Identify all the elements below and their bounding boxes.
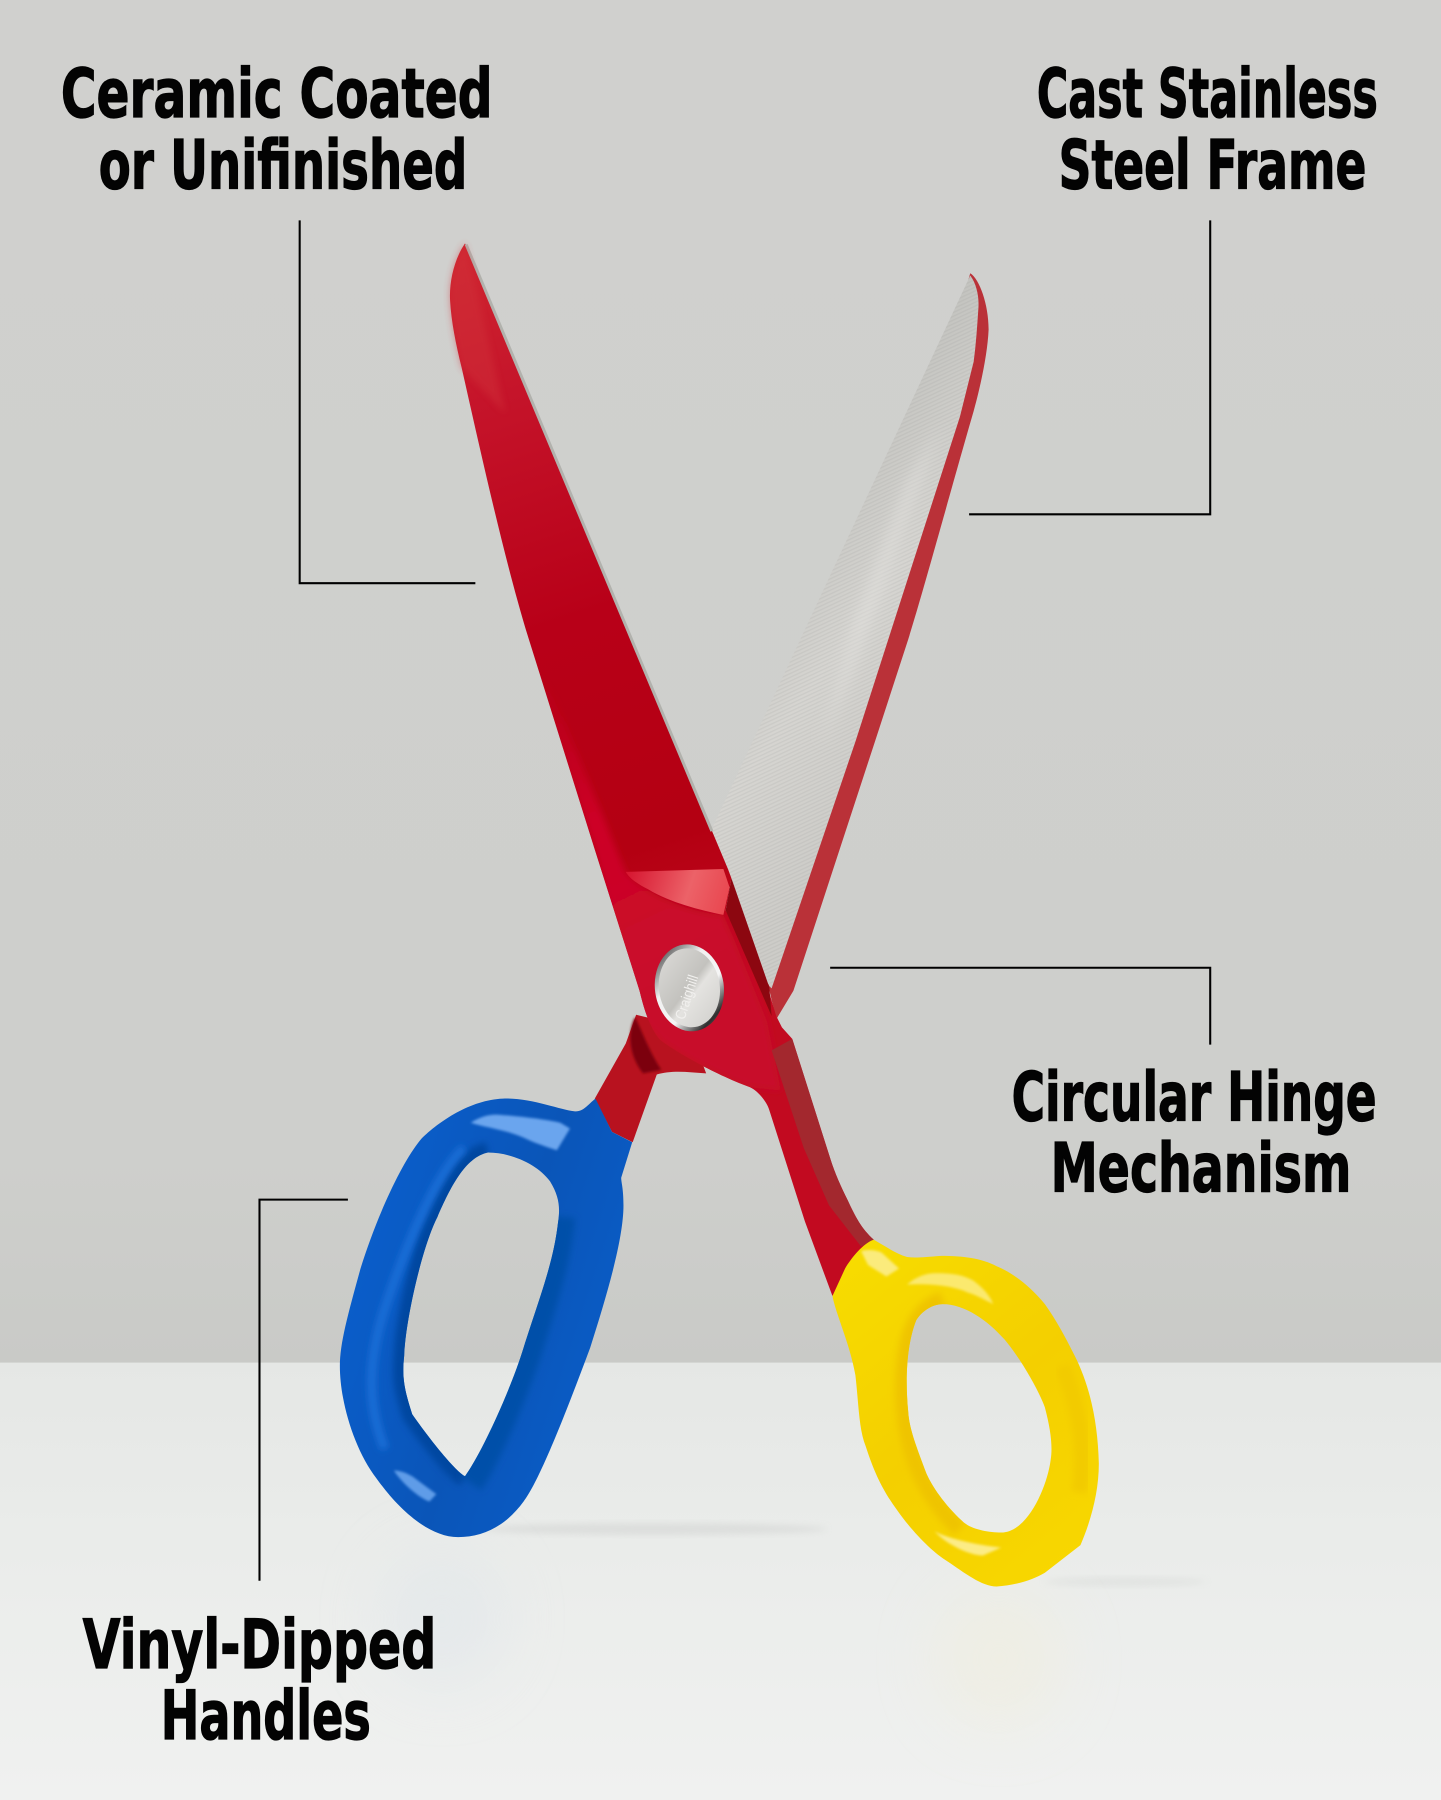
yellow handle <box>832 1240 1099 1586</box>
leader line to blue handle <box>259 1200 348 1581</box>
heading: Ceramic Coated or Unifinished <box>61 54 493 204</box>
heading: Vinyl-Dipped Handles: Vinyl-Dipped <box>83 1605 436 1684</box>
callout: ceramic coated <box>61 54 493 583</box>
coated texture at blade tip <box>450 243 505 413</box>
floor shadows and reflections <box>379 1523 1206 1728</box>
heading: Vinyl-Dipped Handles: Handles <box>161 1676 371 1755</box>
callout: vinyl handles <box>83 1200 436 1755</box>
blue handle highlights <box>471 1115 570 1150</box>
heading: Ceramic Coated or Unifinished: or Unifinished <box>99 125 467 204</box>
right blade: red frame edge <box>768 273 989 1019</box>
heading: Circular Hinge Mechanism <box>1012 1057 1377 1208</box>
lower body lighter face <box>551 710 777 1090</box>
heading: Cast Stainless Steel Frame <box>1037 54 1378 204</box>
blade inner steel edge <box>466 245 712 831</box>
leader line to right blade <box>969 220 1210 514</box>
yellow handle highlights <box>861 1250 899 1277</box>
scissors <box>340 243 1099 1586</box>
background wall <box>0 0 1441 1363</box>
background table surface <box>0 1363 1441 1800</box>
callout: circular hinge <box>830 968 1377 1208</box>
callout: cast stainless <box>969 54 1378 514</box>
leader line to hinge <box>830 968 1210 1045</box>
left handle arm <box>595 1015 706 1142</box>
lower arm shaded side <box>772 1039 874 1247</box>
heading: Ceramic Coated or Unifinished: Ceramic Coated <box>61 54 493 133</box>
shaded wedge beside blade <box>726 878 772 1016</box>
hinge rivet <box>649 940 730 1036</box>
rivet brand text: Craighill <box>671 973 702 1022</box>
leader line to left blade <box>300 220 475 583</box>
left blade and hinge body <box>450 243 874 1296</box>
right blade: steel face <box>711 276 979 988</box>
blue handle <box>340 1099 632 1537</box>
heading: Vinyl-Dipped Handles <box>83 1605 436 1755</box>
glossy highlight <box>626 869 730 915</box>
